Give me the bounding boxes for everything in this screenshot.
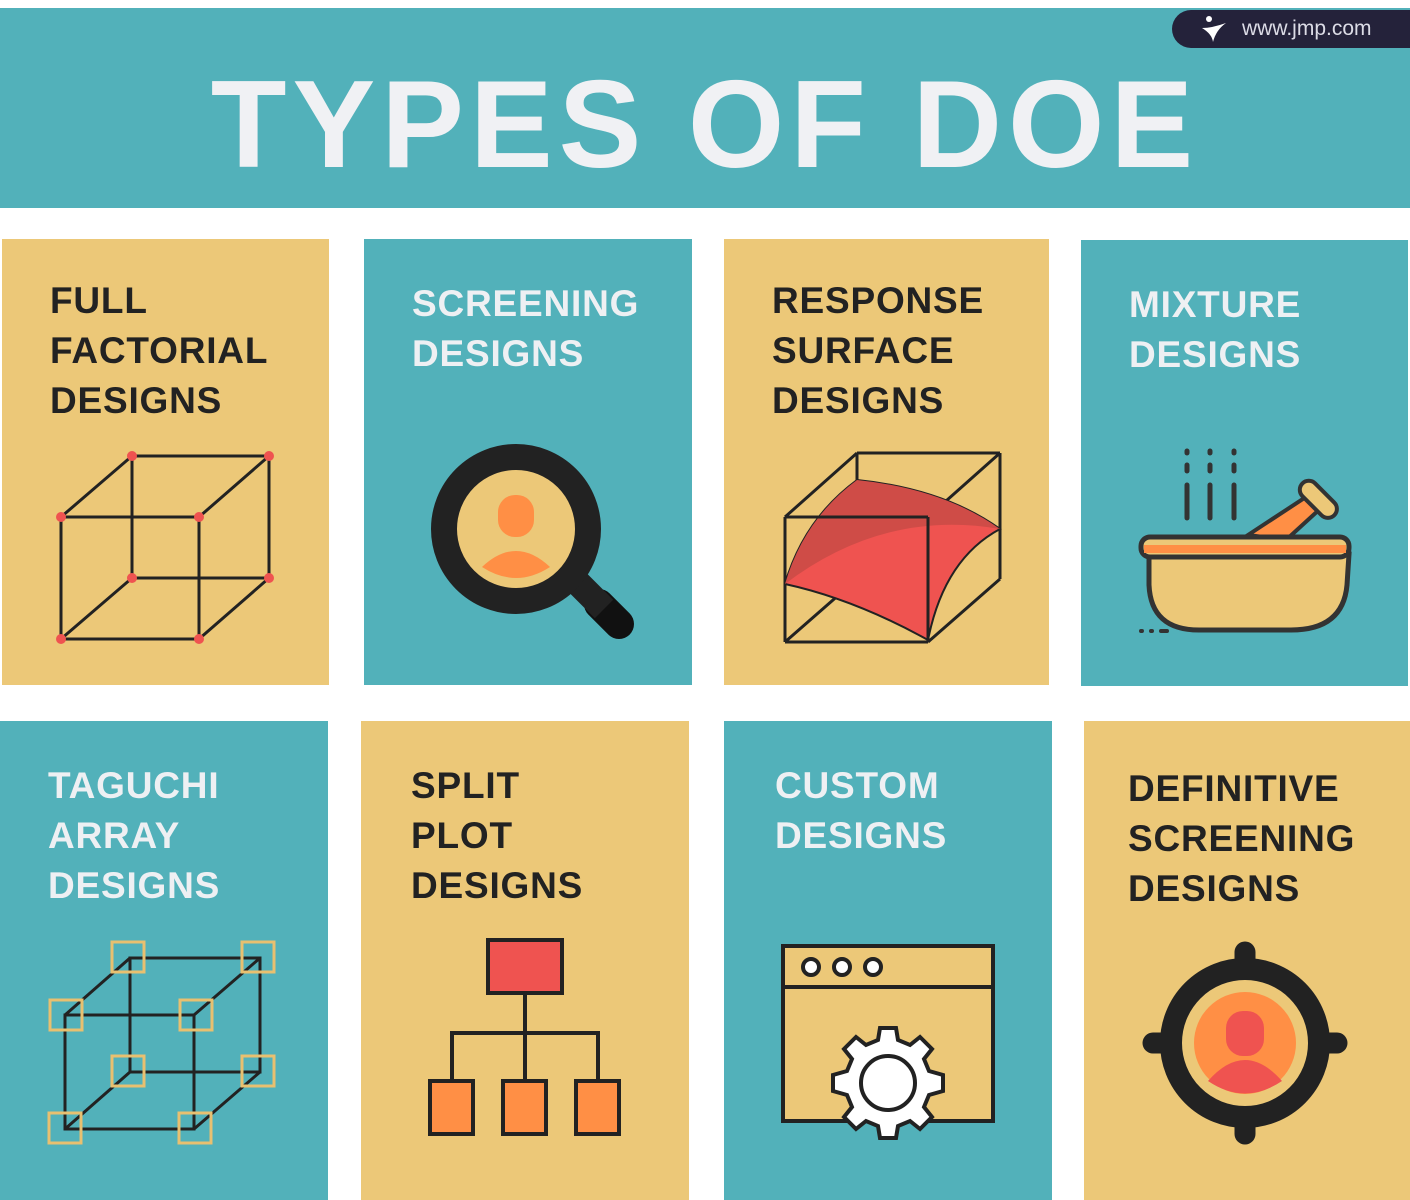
icon: cube <box>56 451 274 644</box>
heading: SURFACE <box>772 330 954 371</box>
heading: DEFINITIVE <box>1128 768 1340 809</box>
panel: response surface <box>724 239 1049 685</box>
panel: split plot <box>361 721 689 1200</box>
panel: full factorial <box>2 239 329 685</box>
panel: screening <box>364 239 692 685</box>
icon: magnifier <box>431 444 634 639</box>
url text: www.jmp.com <box>1242 17 1372 40</box>
heading <box>411 765 583 906</box>
heading: MIXTURE <box>1129 284 1301 325</box>
heading: SCREENING <box>412 283 639 324</box>
heading <box>412 283 639 374</box>
heading <box>775 765 947 856</box>
heading <box>1129 284 1301 375</box>
heading: DESIGNS <box>1129 334 1301 375</box>
heading <box>772 280 984 421</box>
heading: RESPONSE <box>772 280 984 321</box>
heading: SCREENING <box>1128 818 1355 859</box>
icon: taguchi cube <box>48 940 276 1144</box>
heading: FACTORIAL <box>50 330 268 371</box>
icon: mortar and pestle <box>1138 448 1352 633</box>
title: TYPES OF DOE <box>211 56 1199 194</box>
header band <box>0 8 1410 208</box>
heading <box>50 280 268 421</box>
heading: PLOT <box>411 815 513 856</box>
heading: DESIGNS <box>775 815 947 856</box>
heading: FULL <box>50 280 148 321</box>
panel: mixture <box>1081 240 1408 686</box>
panel: definitive screening <box>1084 721 1410 1200</box>
icon: jmp figure <box>1202 16 1226 42</box>
panel: taguchi <box>0 721 328 1200</box>
heading: DESIGNS <box>772 380 944 421</box>
heading: ARRAY <box>48 815 180 856</box>
heading <box>1128 768 1355 909</box>
heading: DESIGNS <box>411 865 583 906</box>
icon: window with gear <box>781 944 995 1140</box>
heading: DESIGNS <box>50 380 222 421</box>
icon: surface cube <box>784 452 1002 644</box>
heading: CUSTOM <box>775 765 939 806</box>
heading: DESIGNS <box>48 865 220 906</box>
panel: custom <box>724 721 1052 1200</box>
heading: TAGUCHI <box>48 765 219 806</box>
icon: target <box>1142 942 1348 1144</box>
heading: SPLIT <box>411 765 520 806</box>
logo badge <box>1172 10 1410 48</box>
icon: hierarchy <box>428 938 621 1136</box>
heading: DESIGNS <box>1128 868 1300 909</box>
heading: DESIGNS <box>412 333 584 374</box>
heading <box>48 765 220 906</box>
